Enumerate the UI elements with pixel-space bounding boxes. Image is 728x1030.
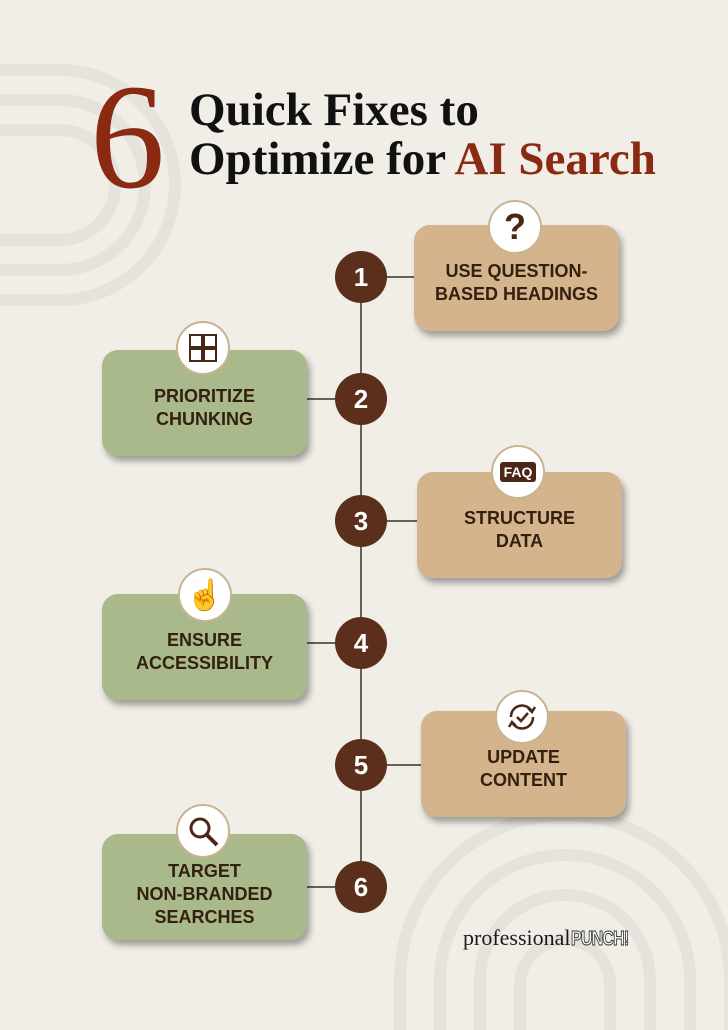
- card 6: SEARCHES: [154, 906, 255, 926]
- card 5: [421, 711, 626, 817]
- card 3: [417, 472, 622, 578]
- title text: [189, 84, 656, 185]
- icon: FAQ: [491, 445, 545, 499]
- step 5 number: [335, 739, 387, 791]
- step 5 number: 5: [354, 750, 368, 780]
- icon: refresh check: [495, 690, 549, 744]
- step 2 number: 2: [354, 384, 368, 414]
- card 6: [102, 834, 307, 940]
- card 4: ACCESSIBILITY: [136, 653, 273, 673]
- icon: FAQ: FAQ: [504, 464, 532, 480]
- card 2: [102, 350, 307, 456]
- step 3 number: [335, 495, 387, 547]
- step 6 number: [335, 861, 387, 913]
- big number 6: 6: [90, 54, 165, 220]
- step 4 number: [335, 617, 387, 669]
- icon: chunk grid: [176, 321, 230, 375]
- title text: Optimize for AI Search: [189, 133, 656, 185]
- card 4: ENSURE: [167, 630, 242, 650]
- step 3 number: 3: [354, 506, 368, 536]
- step 1 number: [335, 251, 387, 303]
- step 2 number: [335, 373, 387, 425]
- card 5: CONTENT: [480, 770, 567, 790]
- title: [90, 54, 656, 220]
- icon: question mark: [488, 200, 542, 254]
- title text: Quick Fixes to: [189, 84, 479, 136]
- icon: question mark: ?: [504, 206, 526, 247]
- card 1: BASED HEADINGS: [435, 284, 598, 304]
- icon: hand pointer: ☝: [186, 578, 224, 612]
- card 3: DATA: [496, 531, 543, 551]
- icon: hand pointer: [178, 568, 232, 622]
- step 1 number: 1: [354, 262, 368, 292]
- timeline line: [360, 277, 362, 887]
- step 4 number: 4: [354, 628, 368, 658]
- card 6: TARGET: [168, 860, 241, 880]
- step 6 number: 6: [354, 872, 368, 902]
- card 1: [414, 225, 619, 331]
- card 2: CHUNKING: [156, 409, 253, 429]
- card 3: STRUCTURE: [464, 508, 575, 528]
- icon: magnifier: [176, 804, 230, 858]
- card 4: [102, 594, 307, 700]
- logo: [463, 925, 628, 950]
- logo: professional: [463, 925, 571, 950]
- card 2: PRIORITIZE: [154, 386, 255, 406]
- card 1: USE QUESTION-: [445, 261, 588, 281]
- logo: PUNCH!: [571, 928, 628, 950]
- card 5: UPDATE: [487, 747, 560, 767]
- card 6: NON-BRANDED: [136, 884, 272, 904]
